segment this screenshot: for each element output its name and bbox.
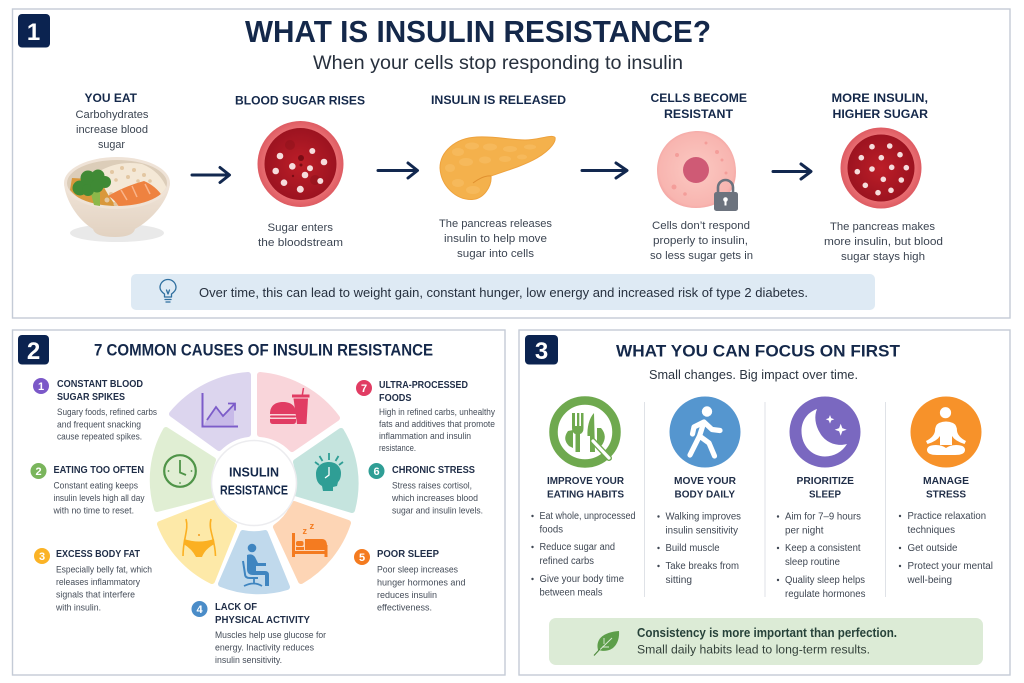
step 5: more insulin, higher sugar: MORE INSULIN,: [832, 92, 928, 105]
cause 4: 4: [196, 604, 203, 616]
panel 2: seven common causes: [12, 330, 505, 675]
cause 4: Muscles help use glucose for: [215, 630, 326, 640]
arrow 1: [192, 168, 230, 182]
step 4: cells become resistant: [650, 92, 753, 262]
arrow 2: [378, 163, 418, 178]
cause 3: [34, 548, 152, 612]
cause 2: [30, 463, 145, 516]
cause 2: 2: [35, 466, 42, 478]
column 2: move your body: Walking improves: [666, 512, 741, 522]
icon: pancreas: [440, 136, 555, 200]
column 3: prioritize sleep: Quality sleep helps: [785, 575, 865, 586]
cause 5: effectiveness.: [377, 602, 432, 612]
cause 2: insulin levels high all day: [54, 493, 145, 503]
cause 4: PHYSICAL ACTIVITY: [215, 615, 310, 626]
centre hub label: [212, 440, 296, 526]
column 3: prioritize sleep: regulate hormones: [785, 589, 866, 600]
section badge 1: 1: [27, 19, 40, 46]
step 4: cells become resistant: RESISTANT: [664, 108, 733, 121]
cause 5: hunger hormones and: [377, 578, 466, 588]
column 1: eating habits: Reduce sugar and: [540, 542, 615, 553]
column 3: prioritize sleep: [777, 396, 866, 600]
wedge 2: clock icon: [153, 430, 213, 509]
centre hub label: INSULIN: [229, 466, 279, 480]
column 3: prioritize sleep: SLEEP: [809, 490, 841, 500]
column 4: manage stress: MANAGE: [923, 476, 969, 487]
arrow 4: [773, 164, 811, 179]
wedge 5: bed icon: [276, 504, 348, 581]
step 3: insulin is released: sugar into cells: [457, 248, 534, 260]
cause 3: signals that interfere: [56, 590, 135, 600]
cause 7: ULTRA-PROCESSED: [379, 380, 468, 391]
section badge 1: [18, 14, 50, 48]
column 2: move your body: insulin sensitivity: [666, 526, 738, 536]
cause 6: CHRONIC STRESS: [392, 465, 475, 476]
column 1: eating habits: EATING HABITS: [547, 490, 624, 500]
cause 7: resistance.: [379, 443, 416, 453]
section badge 3: 3: [535, 338, 548, 365]
step 3: insulin is released: insulin to help move: [444, 233, 547, 245]
callout: consistency banner: Small daily habits lead to long-term results.: [637, 642, 870, 656]
cause 1: Sugary foods, refined carbs: [57, 407, 157, 417]
step 3: insulin is released: INSULIN IS RELEASED: [431, 94, 566, 107]
cause 4: LACK OF: [215, 602, 257, 613]
subheading: Small changes. Big impact over time.: [649, 367, 858, 382]
cause 5: reduces insulin: [377, 590, 437, 600]
cause 7: High in refined carbs, unhealthy: [379, 407, 495, 417]
step 4: cells become resistant: so less sugar gets in: [650, 250, 753, 262]
step 5: more insulin, higher sugar: HIGHER SUGAR: [832, 108, 929, 121]
column 4: manage stress: Get outside: [908, 543, 958, 554]
step 4: cells become resistant: Cells don’t respond: [652, 220, 750, 232]
column 1: eating habits: refined carbs: [540, 556, 594, 567]
cause 1: SUGAR SPIKES: [57, 392, 125, 403]
cause 6: sugar and insulin levels.: [392, 506, 483, 516]
cause 3: Especially belly fat, which: [56, 564, 152, 574]
column 4: manage stress: well-being: [907, 575, 952, 586]
heading: focus: WHAT YOU CAN FOCUS ON FIRST: [616, 342, 901, 361]
step 5: more insulin, higher sugar: [824, 92, 943, 263]
step 5: more insulin, higher sugar: The pancreas makes: [830, 221, 935, 233]
cause 1: and frequent snacking: [57, 420, 141, 430]
cause 2: with no time to reset.: [53, 506, 134, 516]
cause 3: EXCESS BODY FAT: [56, 549, 140, 560]
icon: moon and stars: [790, 396, 860, 468]
cause 7: FOODS: [379, 393, 412, 404]
icon: resistant cell with padlock: [657, 131, 738, 211]
column 1: eating habits: between meals: [540, 588, 602, 598]
step 1: you eat: YOU EAT: [84, 92, 137, 105]
column 1: eating habits: foods: [540, 524, 563, 536]
cause 5: [354, 549, 466, 612]
step 1: you eat: Carbohydrates: [76, 109, 149, 121]
cause 6: which increases blood: [391, 493, 478, 503]
column 2: move your body: Take breaks from: [666, 561, 739, 572]
cause 7: fats and additives that promote: [379, 419, 495, 429]
heading: causes: 7 COMMON CAUSES OF INSULIN RESISTANCE: [94, 342, 433, 360]
cause 5: POOR SLEEP: [377, 549, 439, 560]
cause 4: insulin sensitivity.: [215, 655, 282, 665]
step 2: blood sugar rises: Sugar enters: [268, 222, 333, 234]
cause 7: 7: [361, 383, 367, 395]
step 2: blood sugar rises: BLOOD SUGAR RISES: [235, 94, 365, 108]
icon: food bowl: [64, 157, 170, 242]
centre hub label: RESISTANCE: [220, 484, 288, 498]
subtitle: When your cells stop responding to insulin: [313, 53, 683, 74]
step 3: insulin is released: The pancreas releases: [439, 218, 552, 230]
column 2: move your body: Build muscle: [666, 543, 720, 554]
step 2: blood sugar rises: [235, 94, 365, 249]
column 1: eating habits: [531, 400, 636, 598]
icon: meditating person: [910, 396, 982, 468]
wedge 4: seated person icon: [221, 533, 287, 591]
section badge 2: [18, 335, 49, 365]
section badge 2: 2: [27, 338, 40, 365]
panel 3: what you can focus on first: [519, 330, 1010, 675]
column 2: move your body: sitting: [666, 575, 692, 586]
callout: long-term risk banner: [131, 274, 875, 310]
column 2: move your body: BODY DAILY: [674, 490, 735, 500]
column 1: eating habits: Eat whole, unprocessed: [540, 511, 636, 522]
column 1: eating habits: IMPROVE YOUR: [547, 476, 625, 487]
column 2: move your body: [657, 396, 741, 586]
cause 5: 5: [359, 552, 365, 564]
column 3: prioritize sleep: sleep routine: [785, 557, 840, 568]
icon: blood vessel with more sugar: [840, 128, 922, 208]
wedge 1: chart icon: [172, 375, 248, 448]
cause 1: cause repeated spikes.: [57, 432, 142, 442]
cause 3: 3: [39, 551, 45, 563]
step 3: insulin is released: [431, 94, 566, 260]
panel 1: what is insulin resistance: [12, 9, 1010, 318]
section badge 3: [525, 335, 558, 365]
cause 3: releases inflammatory: [56, 577, 140, 587]
step 5: more insulin, higher sugar: sugar stays high: [841, 251, 925, 263]
icon: light bulb: [160, 280, 176, 302]
cause 4: [192, 601, 326, 665]
wedge 7: fast food icon: [260, 375, 337, 449]
step 5: more insulin, higher sugar: more insulin, but blood: [824, 236, 943, 248]
column 3: prioritize sleep: per night: [785, 526, 824, 536]
callout: consistency banner: [549, 618, 983, 665]
icon: plate with fork and knife: [554, 400, 616, 464]
wedge 3: waist icon: [160, 503, 234, 581]
column 4: manage stress: [899, 396, 993, 586]
column 1: eating habits: Give your body time: [540, 574, 624, 585]
wedge 5: bed icon: z: [310, 521, 314, 532]
icon: blood vessel: [258, 121, 344, 207]
column 3: prioritize sleep: Keep a consistent: [785, 543, 861, 554]
cause 5: Poor sleep increases: [377, 564, 458, 574]
wheel diagram: [153, 375, 356, 591]
cause 7: inflammation and insulin: [379, 431, 471, 441]
callout: consistency banner: Consistency is more important than perfection.: [637, 626, 897, 640]
column 4: manage stress: STRESS: [926, 490, 966, 500]
cause 7: [356, 380, 495, 453]
cause 1: [33, 378, 157, 442]
column 4: manage stress: Protect your mental: [908, 561, 993, 572]
cause 1: 1: [38, 381, 44, 393]
cause 6: 6: [373, 466, 380, 478]
title: WHAT IS INSULIN RESISTANCE?: [245, 15, 711, 49]
step 4: cells become resistant: properly to insulin,: [653, 235, 748, 247]
icon: leaf: [594, 631, 619, 656]
cause 6: Stress raises cortisol,: [392, 480, 472, 490]
arrow 3: [582, 163, 627, 178]
cause 2: EATING TOO OFTEN: [54, 465, 144, 476]
step 1: you eat: increase blood: [76, 124, 148, 136]
cause 1: CONSTANT BLOOD: [57, 379, 143, 390]
wedge 6: stressed head icon: [295, 431, 356, 510]
column 4: manage stress: techniques: [908, 525, 955, 536]
cause 6: [368, 463, 483, 516]
step 1: you eat: [64, 92, 170, 242]
wedge 5: bed icon: z: [302, 526, 308, 536]
callout: long-term risk banner: Over time, this can lead to weight gain, constant hunger, low energy and increased risk of type 2 diabetes.: [199, 285, 808, 300]
column 4: manage stress: Practice relaxation: [908, 511, 986, 522]
step 1: you eat: sugar: [98, 139, 125, 151]
cause 2: Constant eating keeps: [54, 480, 138, 490]
cause 3: with insulin.: [55, 602, 101, 612]
column 2: move your body: MOVE YOUR: [674, 476, 737, 487]
cause 4: energy. Inactivity reduces: [215, 642, 314, 652]
step 2: blood sugar rises: the bloodstream: [258, 237, 343, 249]
column 3: prioritize sleep: PRIORITIZE: [796, 476, 854, 487]
column 3: prioritize sleep: Aim for 7–9 hours: [785, 512, 861, 522]
step 4: cells become resistant: CELLS BECOME: [650, 92, 747, 105]
icon: walking person: [670, 396, 740, 468]
